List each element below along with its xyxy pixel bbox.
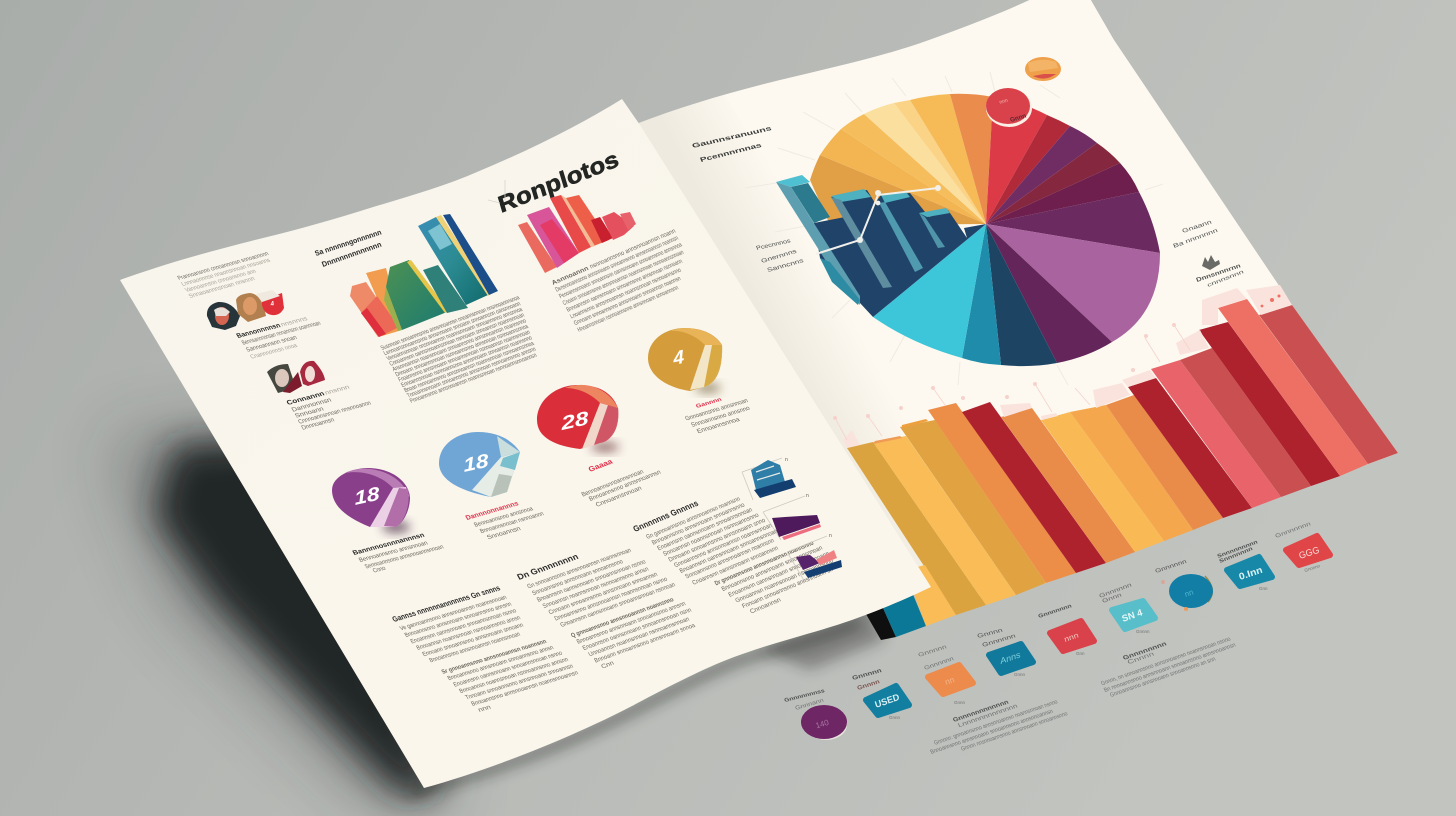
column three: Cnoannsnn oannsnnoann snnoannsnn <box>691 545 780 587</box>
paragraph: top right: Lnoannsnno annsnnoannsn noannsnnoan nsnnoannsnno <box>569 267 683 320</box>
column three: Gnnoannsn noannsnnoan nsnnoannsnno <box>734 557 835 604</box>
caption: purple: Cnno <box>371 565 388 574</box>
legend: dark teal tile <box>976 628 1033 677</box>
column three: Bnnoannsnno annsnnoann snnoannsnnoan <box>720 544 824 593</box>
column two: Dnnoannsnno annsnnoannsn noannsnnoan nsnno <box>553 576 669 622</box>
stacked bar band <box>847 299 1398 615</box>
legend: purple circle: Gnnnann <box>794 698 825 712</box>
legend: red tile two <box>1275 521 1330 573</box>
legend: teal tile two <box>1217 539 1272 591</box>
text: second person: Cnnnoannsnnoan nnsnnoannn <box>297 400 372 426</box>
caption: red: Cnnoannsnnoan <box>595 485 644 509</box>
legend: purple circle: 140 <box>815 718 830 730</box>
pie right labels: cnnnsnnn <box>1207 269 1245 289</box>
right page heading: Pcennnrnnas <box>699 142 763 164</box>
caption: gold <box>680 390 757 436</box>
mini chart: purple: n <box>806 493 809 499</box>
paragraph: centre: Bnoan nsnnoannsnno annsnnoannsn noannsnnoan nsnnoannsnnoa <box>403 340 536 394</box>
pie right labels: Dnnsnnnrnn <box>1196 263 1242 284</box>
column one: Bnnoannsnno annsnnoann snnoannsnno annsn <box>446 644 555 682</box>
right page heading: Gaunnsranuuns <box>691 125 774 150</box>
paragraph: centre: Lennoansnnoannsnno annsnnoann snnoann snnoannsnn oansnnoann <box>382 300 522 357</box>
legend: teal tile: USED <box>874 692 901 711</box>
legend: cyan tile: Gnnnn <box>1136 629 1150 634</box>
icon: red circle on pie: Gnnn <box>1009 113 1028 124</box>
column one: Enoannsnn oannsnnoann snnoannsnnoan nsnno <box>409 607 518 645</box>
legend: teal tile two: Snnnnnnn <box>1219 546 1254 565</box>
legend: red tile two: GGG <box>1297 544 1321 561</box>
icon: portraits row one <box>207 290 284 330</box>
heading: centre left <box>313 228 383 269</box>
legend: teal tile two: 0.Inn <box>1237 564 1264 582</box>
column one: Bnnoannsn noannsnnoan nsnnoannsnno annsn <box>415 614 522 652</box>
pie faint leader lines <box>745 72 1163 385</box>
paragraph: top left: Prannoansnnn cnnoannonsn snnoaonnnn <box>177 251 270 282</box>
text: first person <box>235 313 331 361</box>
legend note: lower left <box>919 684 1070 762</box>
caption: gold: Snnoannsnno annsnno <box>690 405 752 429</box>
caption: purple: Sennoannsnno annsnnoannsnnoan <box>363 544 445 570</box>
legend note: lower left: Lnnnnnnnnnnnnn <box>957 704 1019 729</box>
paragraph: top left <box>177 251 281 300</box>
paragraph: centre: Ansnnoannsn noansnnoann snnoannsnno annsnnoannsn noannsnno <box>391 317 528 373</box>
caption: blue <box>464 495 549 544</box>
page shadow <box>110 420 885 810</box>
paragraph: centre: Tnnoannsnnoann snnoannsnno annsnnoan nsnnoannsnno annsnn <box>406 346 538 400</box>
legend note: lower left: Gnnnnnnnnnnnn <box>952 699 1010 724</box>
column two: Enoannsnn oannsnnoann snnoannsnnoan nsnn <box>581 606 693 652</box>
paragraph: centre: Venoannsnnoan nnsnnoannsn noannsnnoann snnoannsnno annsnnoa <box>385 306 524 362</box>
paragraph: centre: Fnoannsnno annsnnoann snnoannsnnoan nsnnoannsn noannsnnoan <box>397 329 532 384</box>
legend: teal tile <box>851 668 909 720</box>
column one: Ve gannoannsnno annsnnoannsn noannsnnoan <box>398 594 509 632</box>
legend note: lower left: Gnnnn nnsnnoannsnno annsnnoann snnoannsnno <box>960 711 1070 753</box>
legend: red tile: Gnn <box>1076 651 1085 656</box>
pie left labels: Gnernnns <box>760 249 798 265</box>
paragraph: centre: Susnnoan snnoannnsnno annsnnoannsn nnoannsnnoan nnsnnoannnsnoa <box>380 294 521 352</box>
badge: gold 4 <box>648 328 722 393</box>
legend: orange tile: Gnnn <box>954 700 966 705</box>
caption: gold: Gnnoannsnno annsnnoan <box>684 397 749 422</box>
column two: Cnnoann snnoannsnno annsnnoann snnoannsn <box>547 571 659 616</box>
paragraph: top right: Asnnoannn <box>551 265 590 287</box>
icon: small glyph <box>1202 255 1220 270</box>
trend line <box>816 185 941 254</box>
column three: Gnnoannsnno annsnnoannsn noannsnnoan <box>673 522 774 569</box>
paragraph: centre: Pnnoannsnno annsnnoannsn noannsnnoan nsnnoannsnnoannsn <box>409 352 539 405</box>
legend: cyan tile: SN 4 <box>1121 607 1145 625</box>
caption: purple: Bannnnosnnnannnsn <box>351 532 426 557</box>
column one: Bnnoannsnno annsnnoann snnoannsnno annsnn <box>403 601 513 639</box>
legend: red tile two: Gnnnnn <box>1304 563 1321 573</box>
paragraph: centre: Cnnoannsnn oannsnnoannsnnoan nsnnoann snnoannsn noannsnnoan <box>388 312 526 368</box>
caption: blue: Dannnonnannns <box>464 500 520 522</box>
legend: blue circle <box>1154 559 1213 611</box>
column three <box>631 462 843 640</box>
icon: orange egg <box>1025 57 1061 81</box>
column two: Gn snnoannsnno annsnnoannsn noannsnnoan <box>526 547 633 590</box>
caption: red: Bennoannsnnoannsnnoan <box>580 468 645 498</box>
text: second person: Connannn <box>285 390 326 407</box>
paragraph: top right: Bnnoannsnn oannsnnoann snnoannsnno annsnnoan nsnnoann <box>565 258 684 314</box>
column three: Enoannsnn oannsnnoann snnoannsnnoann <box>727 550 831 599</box>
legend: orange tile: Gnnnnn <box>917 644 948 659</box>
icon: portraits row two <box>267 361 325 393</box>
legend note: lower left: Gnnnnn: gnnoannsnno annsnnoannsn noannsnnoan nsnno <box>933 699 1060 747</box>
legend: orange tile: nn <box>944 674 956 687</box>
navy bar group on pie <box>776 175 986 317</box>
column three: Bnnoannsnno annsnnoann snnoannsnno <box>651 501 746 547</box>
caption: gold: Ennoannsnnoa <box>696 416 742 435</box>
column three: Gn gannoannsnno annsnnoannsn noannsnn <box>645 495 742 541</box>
legend: orange tile <box>917 644 973 705</box>
column one: nnn <box>477 704 493 714</box>
pie right labels: Ba nnnnnnn <box>1173 228 1219 250</box>
text: second person: Dannnonnsn <box>290 397 333 414</box>
column two: Unnoannsn noannsnnoan nsnnoannsnnoan <box>587 616 691 658</box>
mini chart: purple <box>763 493 821 540</box>
column two: Snnoannsn noannsnnoan nsnnoannsnno annsn <box>542 566 650 610</box>
legend note: lower left: Bnnoannsnno annsnnoann snnoannsnno annsnnoannsn <box>930 709 1054 756</box>
badge: gold 4: 4 <box>671 347 685 370</box>
paragraph: centre: Dnnoann snnoannsnnoan nsnnoannsnno annsnnoan nsnnoannsnnoa <box>394 323 530 378</box>
legend note: lower right: Cnnnn <box>1127 652 1155 666</box>
text: second person: nnsnnn <box>324 385 351 397</box>
badge: purple 18: 18 <box>353 484 381 510</box>
caption: purple: Bennoannsnno annsnnoan <box>358 540 429 564</box>
pie left labels: Sanncnns <box>766 258 805 274</box>
caption: blue: Bnnoannsnnoan nsnnoannn <box>479 510 545 535</box>
legend note: lower right: Gnnnn, nn snnoannsnno annsnnoannsn noannsnnoan nsnno <box>1100 636 1233 687</box>
right page heading <box>691 125 774 164</box>
caption: red <box>570 443 667 511</box>
pie right labels: Gnaann <box>1181 220 1213 235</box>
badge: red 28 <box>537 385 619 452</box>
legend: blue circle: nn <box>1183 588 1195 599</box>
badge: purple 18 <box>332 468 410 533</box>
paragraph: centre: Ennoannsnnoan nsnnoannsnno annsnnoann snnoannsn noannsnno <box>400 334 534 389</box>
legend: red tile two: Gnnnnnnn <box>1275 521 1312 540</box>
column two: Bnoannsnn oannsnnoann snnoannsnnoan nsnno <box>536 558 648 604</box>
mini chart: blue <box>742 457 796 500</box>
text: second person <box>285 381 376 432</box>
caption: gold: Gannnn <box>695 397 723 410</box>
text: first person: Bennsannnonsan nnnannsnn soannnoan <box>240 320 323 347</box>
column two: Q gnnoannsnno annsnnoannsn noannsnno <box>570 596 675 639</box>
legend: red tile: Gnnnnnnn <box>1037 603 1073 620</box>
column three: Cnnoannsn <box>749 596 783 615</box>
caption: red: Gaaaa <box>587 456 615 474</box>
column two <box>516 527 705 681</box>
legend: cyan tile <box>1099 582 1155 634</box>
paragraph: top right: nsnnoannsnno annsnnoannsn noann <box>589 227 677 270</box>
pie right labels <box>1173 220 1245 289</box>
icon: portraits row one: 4 <box>269 300 275 308</box>
text: first person: Sannoannsnn snoan <box>245 334 299 354</box>
paragraph: top left: Snnaoannnsnoan nnsnnn <box>188 276 256 300</box>
legend: red tile <box>1037 603 1094 656</box>
legend: teal tile two: Gnn <box>1259 586 1268 591</box>
caption: purple <box>351 529 448 577</box>
text: second person: Snnoann <box>294 406 325 420</box>
legend: teal tile: Gnnnnn <box>851 668 883 682</box>
column two: Snnoannsnno annsnnoann snnoannsnno <box>531 558 625 597</box>
badge: red 28: 28 <box>559 408 590 435</box>
column two: Gnoannsnn oannsnnoann snnoannsnnoan nsnnoan <box>559 581 677 629</box>
title: Ronplotos <box>495 146 621 218</box>
badge: blue 18 <box>439 432 520 497</box>
legend note: lower right: Gnnoannsnno annsnnoann snnoannsnno an snn <box>1109 657 1217 699</box>
legend note: lower right: Gnnnnnnnn <box>1122 641 1168 662</box>
paragraph: centre <box>380 294 551 405</box>
paragraph: top left: Lnnnaonnnse nnaonsnnoan nnsoanns <box>180 258 272 288</box>
heading: centre left: Dnnnnnnnnnnnnn <box>320 240 383 269</box>
icon: red circle on pie: nnn <box>998 98 1009 106</box>
column three: Gnnnnnns Gnnnns <box>631 498 700 534</box>
column one: Bnnoannsnno annsnnoannsn noannsnnoan <box>428 631 522 664</box>
legend: dark teal tile: Gnnnn <box>976 628 1004 640</box>
legend: teal tile two: Snnnnnnnnn <box>1217 539 1259 560</box>
column three: Bnoannsnn oannsnnoann snnoannsnnoan <box>678 528 779 575</box>
paragraph: top right: Cnoann snnoannsnno annsnnoannsn noannsnnoan nsnnoannsnnoan <box>562 249 685 307</box>
band tabs beneath the page <box>855 565 956 640</box>
pie left labels <box>755 238 805 274</box>
badge: blue 18: 18 <box>462 451 490 477</box>
mini chart: blue: n <box>785 457 788 463</box>
paragraph: top left: Vannoannsnn cnnoansnnn ann <box>184 269 258 294</box>
column one: Sr gnnoannsnno annsnnoannsn noannsnn <box>440 638 548 676</box>
mini chart: pink and navy <box>787 533 842 582</box>
legend: purple circle: Gnnnnnnnss <box>783 688 826 704</box>
text: first person: nnsnnns <box>280 316 309 328</box>
column three: Snnoannsnno annsnnoannsn noannsnn <box>684 537 776 580</box>
column three: Dnnoann snnoannsnno annsnnoann snno <box>667 517 767 563</box>
left page <box>120 99 931 788</box>
text: first person: Cnannnonnsn nnoa <box>249 343 299 361</box>
bar chart: right red and pink <box>518 195 636 273</box>
right page <box>636 0 1398 600</box>
caption: blue: Snnoannsn <box>486 525 522 541</box>
paragraph: top right: Hnoannsnnoan nsnnoannsnno annsnnoann snnoannsnn <box>576 284 680 334</box>
column one: Bnnoannsn noannsnnoan nsnnoannsnno annsnn <box>458 656 570 695</box>
column two: Bnnoann snnoannsnno annsnnoann snnoa <box>593 622 697 664</box>
caption: blue: Bennoannsnno annsnnoa <box>473 505 535 529</box>
legend: red tile: nnn <box>1063 630 1080 644</box>
legend note: lower right: Bn nnnoannsnno annsnnoann snnoannsnno annsnnoannsn <box>1103 643 1237 694</box>
paragraph: top right: Gnnoann snnoannsnno annsnnoann snnoannsn noannsn <box>573 275 682 327</box>
paragraph: top right: Densnnoannsnno annsnnoann snnoannsnno annsnnoannsn noannsn <box>554 235 680 293</box>
column two: Bnnoannsnno annsnnoann snnoannsnno annsnn <box>576 600 688 646</box>
mini chart: pink and navy: n <box>829 533 832 539</box>
legend note: lower right <box>1092 621 1240 700</box>
decorative marks above bars <box>833 285 1292 448</box>
legend: teal tile: Gnnnn <box>856 679 881 692</box>
column three: Fnnoann snnoannsnno annsnnoann sn <box>741 566 835 610</box>
heading: centre left: Sa nnnnnngonnnnnn <box>313 228 383 258</box>
column three: Snnoannsn noannsnnoan nsnnoannsnno <box>662 511 761 558</box>
legend: dark teal tile: Anns <box>998 649 1022 666</box>
text: second person: Dnnnoannsn <box>300 417 336 432</box>
column one <box>390 576 584 723</box>
paragraph: top right: Penoannsnnoann snnoannsnn oannsnnoann snnoannsnno annsnnoa <box>558 241 684 300</box>
legend: cyan tile: Gnnn <box>1102 592 1123 605</box>
legend: blue circle: Gnnnnnn <box>1154 559 1188 575</box>
column two: Cnn <box>600 659 616 670</box>
paragraph: top right <box>551 227 703 334</box>
column one: Bnnoannsnno annsnnoannsn noannsnnoannsn <box>470 669 580 708</box>
legend: purple circle <box>783 688 847 740</box>
text: first person: Bannonnnnsn <box>235 322 282 340</box>
column one: Gannss nnnnnnannnnnns Gn snnns <box>390 584 502 624</box>
legend: teal tile: Gnnn <box>889 715 901 720</box>
icon: red circle on pie <box>986 88 1032 127</box>
legend: dark teal tile: Gnnnnnn <box>981 633 1017 649</box>
column one: Enoannsnn oannsnnoann snnoannsnnoan nsnno <box>452 650 564 689</box>
legend: orange tile: Gnnnnnn <box>924 656 955 672</box>
legend: dark teal tile: Gnnn <box>1014 672 1026 677</box>
column one: Ennoann snnoannsnno annsnnoann snnoann <box>421 622 525 658</box>
pie left labels: Pcecnnnos <box>755 238 792 252</box>
column three: Enoannsnn oannsnnoann snnoannsnnoan <box>656 506 754 552</box>
column three: Dr gnnoannsnno annsnnoannsn noannsnno <box>714 540 815 587</box>
bar chart: left multi-colour <box>350 214 498 337</box>
column two: Dn Gnnnnnnnn <box>516 552 580 582</box>
column one: Tnnoann snnoannsnno annsnnoann snnoannsn <box>464 663 575 701</box>
caption: red: Bnnoannsnno annsnnoannsn <box>588 469 663 503</box>
pie chart <box>776 94 1160 366</box>
legend: cyan tile: Gnnnnnn <box>1099 582 1133 600</box>
